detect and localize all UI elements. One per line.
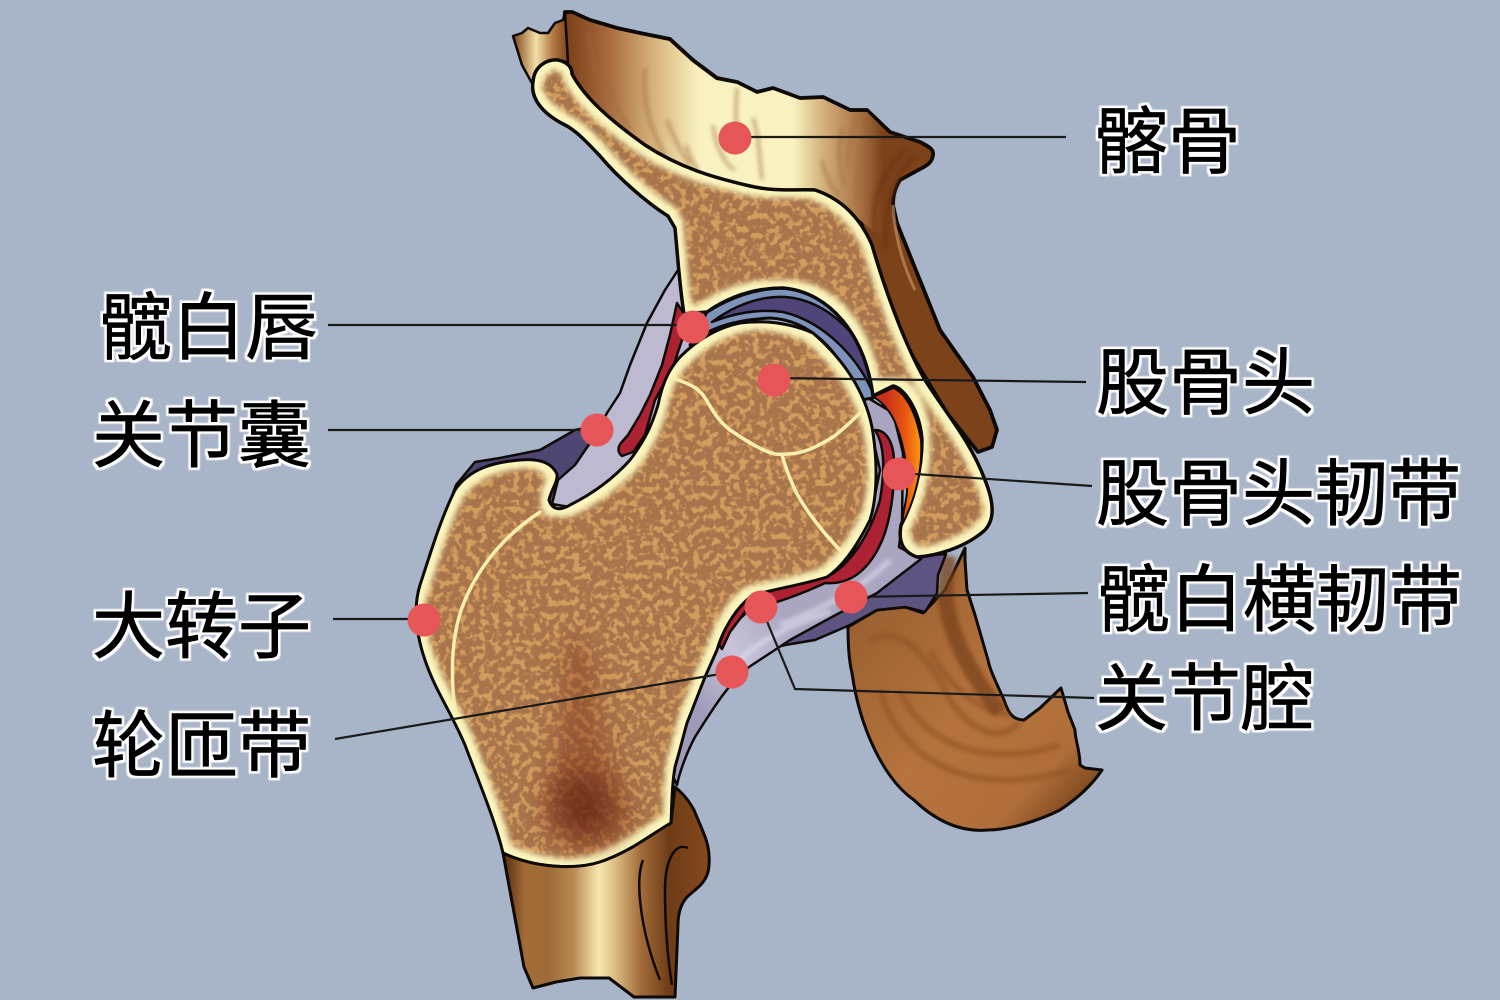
- lower capsule shadow (purple): [765, 554, 946, 650]
- labrum, upper (red): [618, 303, 684, 456]
- label: acetabular labrum: 髋白唇: [99, 288, 318, 369]
- label: joint capsule: 关节囊: [92, 396, 311, 477]
- label: joint cavity: 关节腔: [1095, 659, 1314, 740]
- ligament of femoral head (orange): [873, 388, 921, 525]
- femur cross-section: [416, 322, 876, 867]
- acetabular cartilage (blue): [690, 288, 883, 400]
- upper capsule shadow (purple): [446, 425, 600, 512]
- iliac wing, back fold: [513, 12, 568, 85]
- label: transverse acetabular ligament: 髋白横韧带: [1097, 560, 1462, 641]
- ilium cross-section: [533, 60, 992, 557]
- epiphyseal lines: [452, 378, 863, 712]
- label: ligament of femoral head: 股骨头韧带: [1096, 454, 1461, 535]
- labrum, lower (red): [719, 430, 894, 649]
- bone marrow cavity: [544, 636, 632, 848]
- marker dots: [408, 122, 916, 688]
- ischium: [848, 548, 1102, 830]
- label: ilium: 髂骨: [1095, 102, 1241, 183]
- joint capsule, lower (lavender): [670, 395, 921, 785]
- acetabular fossa (dark purple): [712, 297, 885, 393]
- leader lines: [328, 137, 1094, 739]
- joint capsule, upper (lavender): [552, 270, 695, 508]
- label: greater trochanter: 大转子: [92, 587, 311, 668]
- label: zona orbicularis: 轮匝带: [92, 706, 311, 787]
- iliac wing, inner surface and posterior strip: [560, 12, 997, 452]
- label: femoral head: 股骨头: [1096, 343, 1315, 424]
- femoral shaft: [503, 787, 709, 997]
